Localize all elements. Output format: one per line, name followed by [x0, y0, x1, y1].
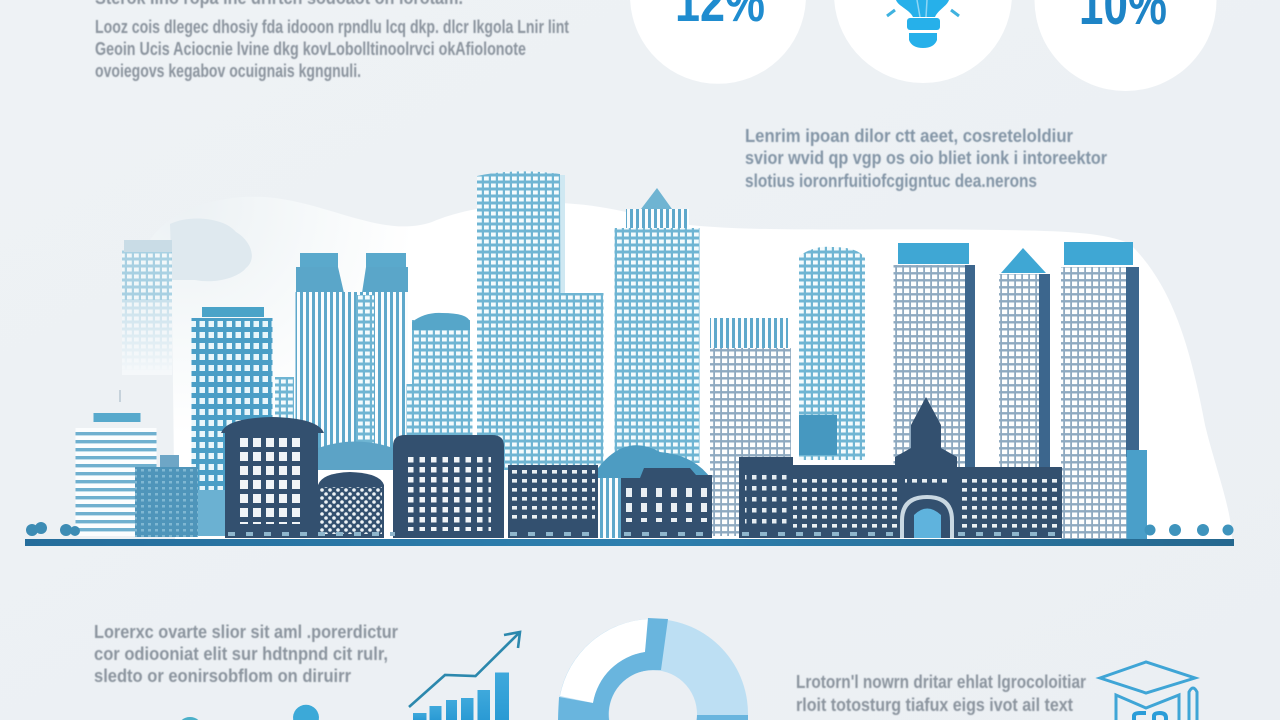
text block: top left: Geoin Ucis Aciocnie lvine dkg kovLobolltinoolrvci okAfiolonote [95, 39, 526, 59]
text block: top right: slotius ioronrfuitiofcgigntuc dea.nerons [745, 171, 1037, 191]
stat circle: 10% [1034, 0, 1217, 91]
text block: top left: Looz cois dlegec dhosiy fda idooon rpndlu lcq dkp. dlcr Ikgola Lnir lint [95, 17, 569, 37]
dark building 5 [621, 468, 712, 538]
building: striped left [76, 413, 156, 536]
segment: blue ring [558, 618, 668, 720]
donut hole [609, 670, 697, 720]
donut chart [558, 618, 748, 720]
building: K [999, 248, 1050, 470]
trend arrow [409, 632, 520, 707]
dark building 1 [221, 417, 324, 538]
dark historic building with spire [739, 397, 1062, 538]
building: H [710, 318, 791, 536]
text block: top right [745, 126, 1107, 191]
building: J [894, 243, 975, 470]
building: blue tower B [192, 307, 294, 533]
street-level trees and traffic [26, 522, 1060, 536]
icon: graduation cap and book [1100, 662, 1197, 720]
bar chart with arrow [409, 632, 520, 720]
text block: top left [95, 0, 569, 81]
building: L [1061, 242, 1147, 541]
building: cluster D [406, 313, 472, 465]
building: tall tower E [477, 171, 565, 470]
dots right of skyline [1144, 524, 1234, 536]
text block: bottom left: Lorerxc ovarte slior sit aml .porerdictur [94, 622, 398, 642]
building: tower F [548, 293, 604, 465]
white wave backdrop [150, 197, 1232, 540]
segment: white [560, 619, 649, 703]
building: twin tower C [296, 253, 408, 465]
text block: top right: svior wvid qp vgp os oio bliet ionk i intoreektor [745, 148, 1107, 168]
building: I [799, 247, 865, 460]
text block: bottom right: rloit totosturg tiafux eigs ivot ail text [796, 695, 1073, 715]
stat circle: 12% [630, 0, 806, 84]
text block: bottom left: cor odiooniat elit sur hdtnpnd cit rulr, [94, 644, 388, 664]
text block: bottom right: Lrotorn'l nowrn dritar ehlat lgrocoloitiar [796, 672, 1086, 692]
arch doorway [900, 495, 954, 538]
cloud [170, 218, 252, 281]
teal domes behind [318, 442, 712, 480]
partial map pins [182, 705, 319, 720]
striped narrow building at base [598, 478, 622, 538]
dark building 4 [508, 465, 598, 538]
dark building 3 [393, 435, 504, 538]
faded background tower [120, 240, 172, 402]
text block: bottom left: sledto or eonirsobflom on diruirr [94, 666, 351, 686]
dark building 2 [318, 472, 384, 538]
ground line [25, 539, 1234, 546]
skyline [25, 171, 1234, 546]
stat circle: light bulb icon [834, 0, 1012, 83]
text block: bottom right [796, 672, 1086, 715]
building: spire tower G [614, 188, 700, 463]
text block: top left: ovoiegovs kegabov ocuignais kgngnuli. [95, 61, 361, 81]
text block: bottom left [94, 622, 398, 686]
text block: top right: Lenrim ipoan dilor ctt aeet, cosreteloldiur [745, 126, 1073, 146]
mid blue cluster [135, 455, 226, 537]
segment: lower right [695, 715, 748, 720]
